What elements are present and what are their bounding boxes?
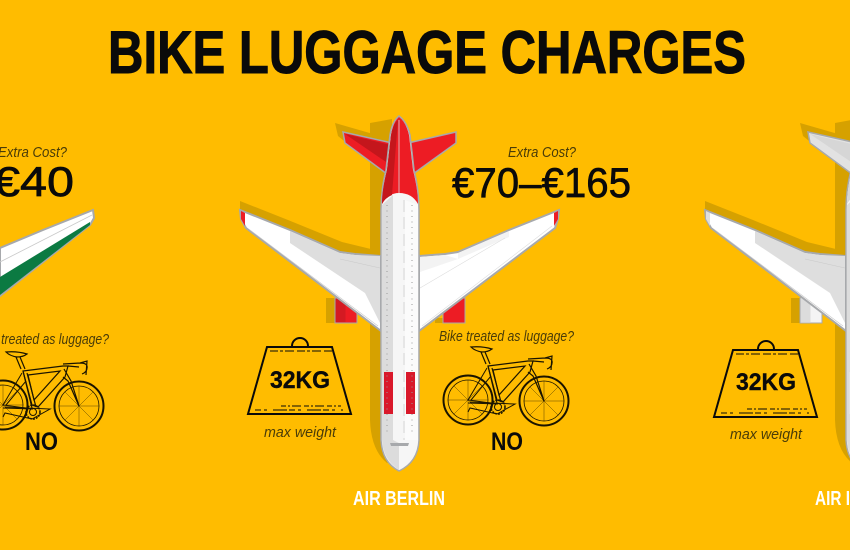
extra cost question: Extra Cost? <box>0 144 68 161</box>
extra cost amount: €70–€165 <box>452 159 631 206</box>
extra cost question: Extra Cost? <box>508 144 577 161</box>
max weight caption: max weight <box>264 424 337 441</box>
bike answer: NO <box>491 428 523 456</box>
panel: Air Berlin <box>240 116 631 510</box>
plane wing: green leading edge <box>0 210 94 296</box>
max weight caption: max weight <box>730 426 803 443</box>
icon: bicycle <box>0 352 104 430</box>
panel: right airline (cropped) <box>705 116 850 510</box>
panel: left airline (cropped) <box>0 144 110 456</box>
max weight value: 32KG <box>270 367 330 394</box>
bike question: Bike treated as luggage? <box>439 328 575 345</box>
plane: red tail <box>240 116 559 471</box>
icon: weight <box>248 338 351 414</box>
airline name: AIR BERLIN <box>353 488 445 510</box>
icon: bicycle <box>444 347 568 426</box>
plane: grey tail <box>705 116 850 471</box>
icon: weight <box>714 341 817 417</box>
max weight value: 32KG <box>736 369 796 396</box>
bike answer: NO <box>25 428 58 456</box>
